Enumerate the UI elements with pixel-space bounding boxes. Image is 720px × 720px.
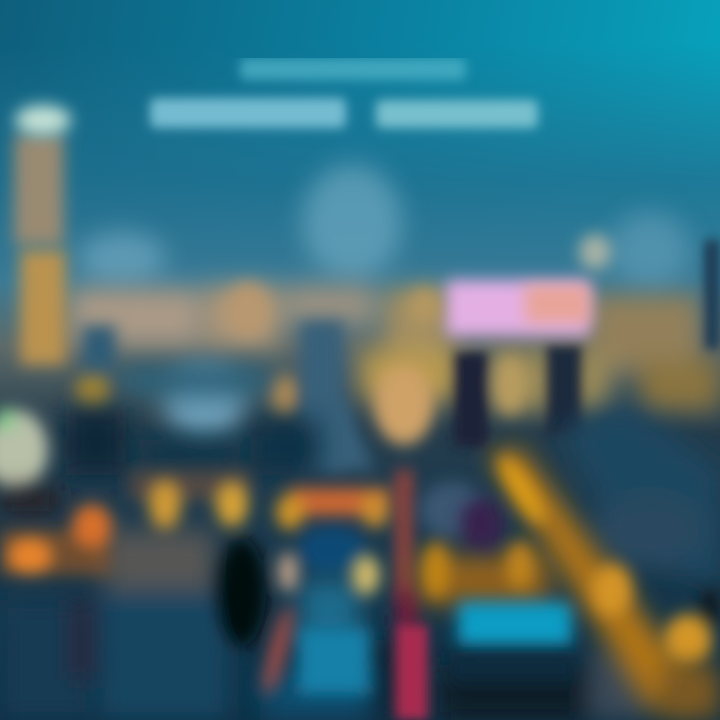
diagonal golden road	[490, 448, 720, 720]
warm mid buildings	[75, 282, 526, 445]
title: blurred heading lines	[150, 58, 538, 128]
cyan screen	[450, 602, 575, 682]
left tower	[14, 105, 71, 365]
red vertical stripe	[396, 470, 428, 720]
skyline warm band	[70, 285, 720, 410]
dark silhouette	[218, 538, 266, 646]
lower foreground dark base	[0, 490, 650, 720]
blue mid buildings	[66, 320, 720, 625]
distant cloud-like towers	[78, 164, 690, 288]
white-green globe at left	[0, 408, 48, 490]
dark towers under billboard	[454, 240, 720, 447]
central blue block	[258, 526, 380, 697]
orange street lights left	[0, 470, 390, 575]
glowing pink billboard	[446, 234, 611, 336]
purple ball	[420, 482, 550, 605]
